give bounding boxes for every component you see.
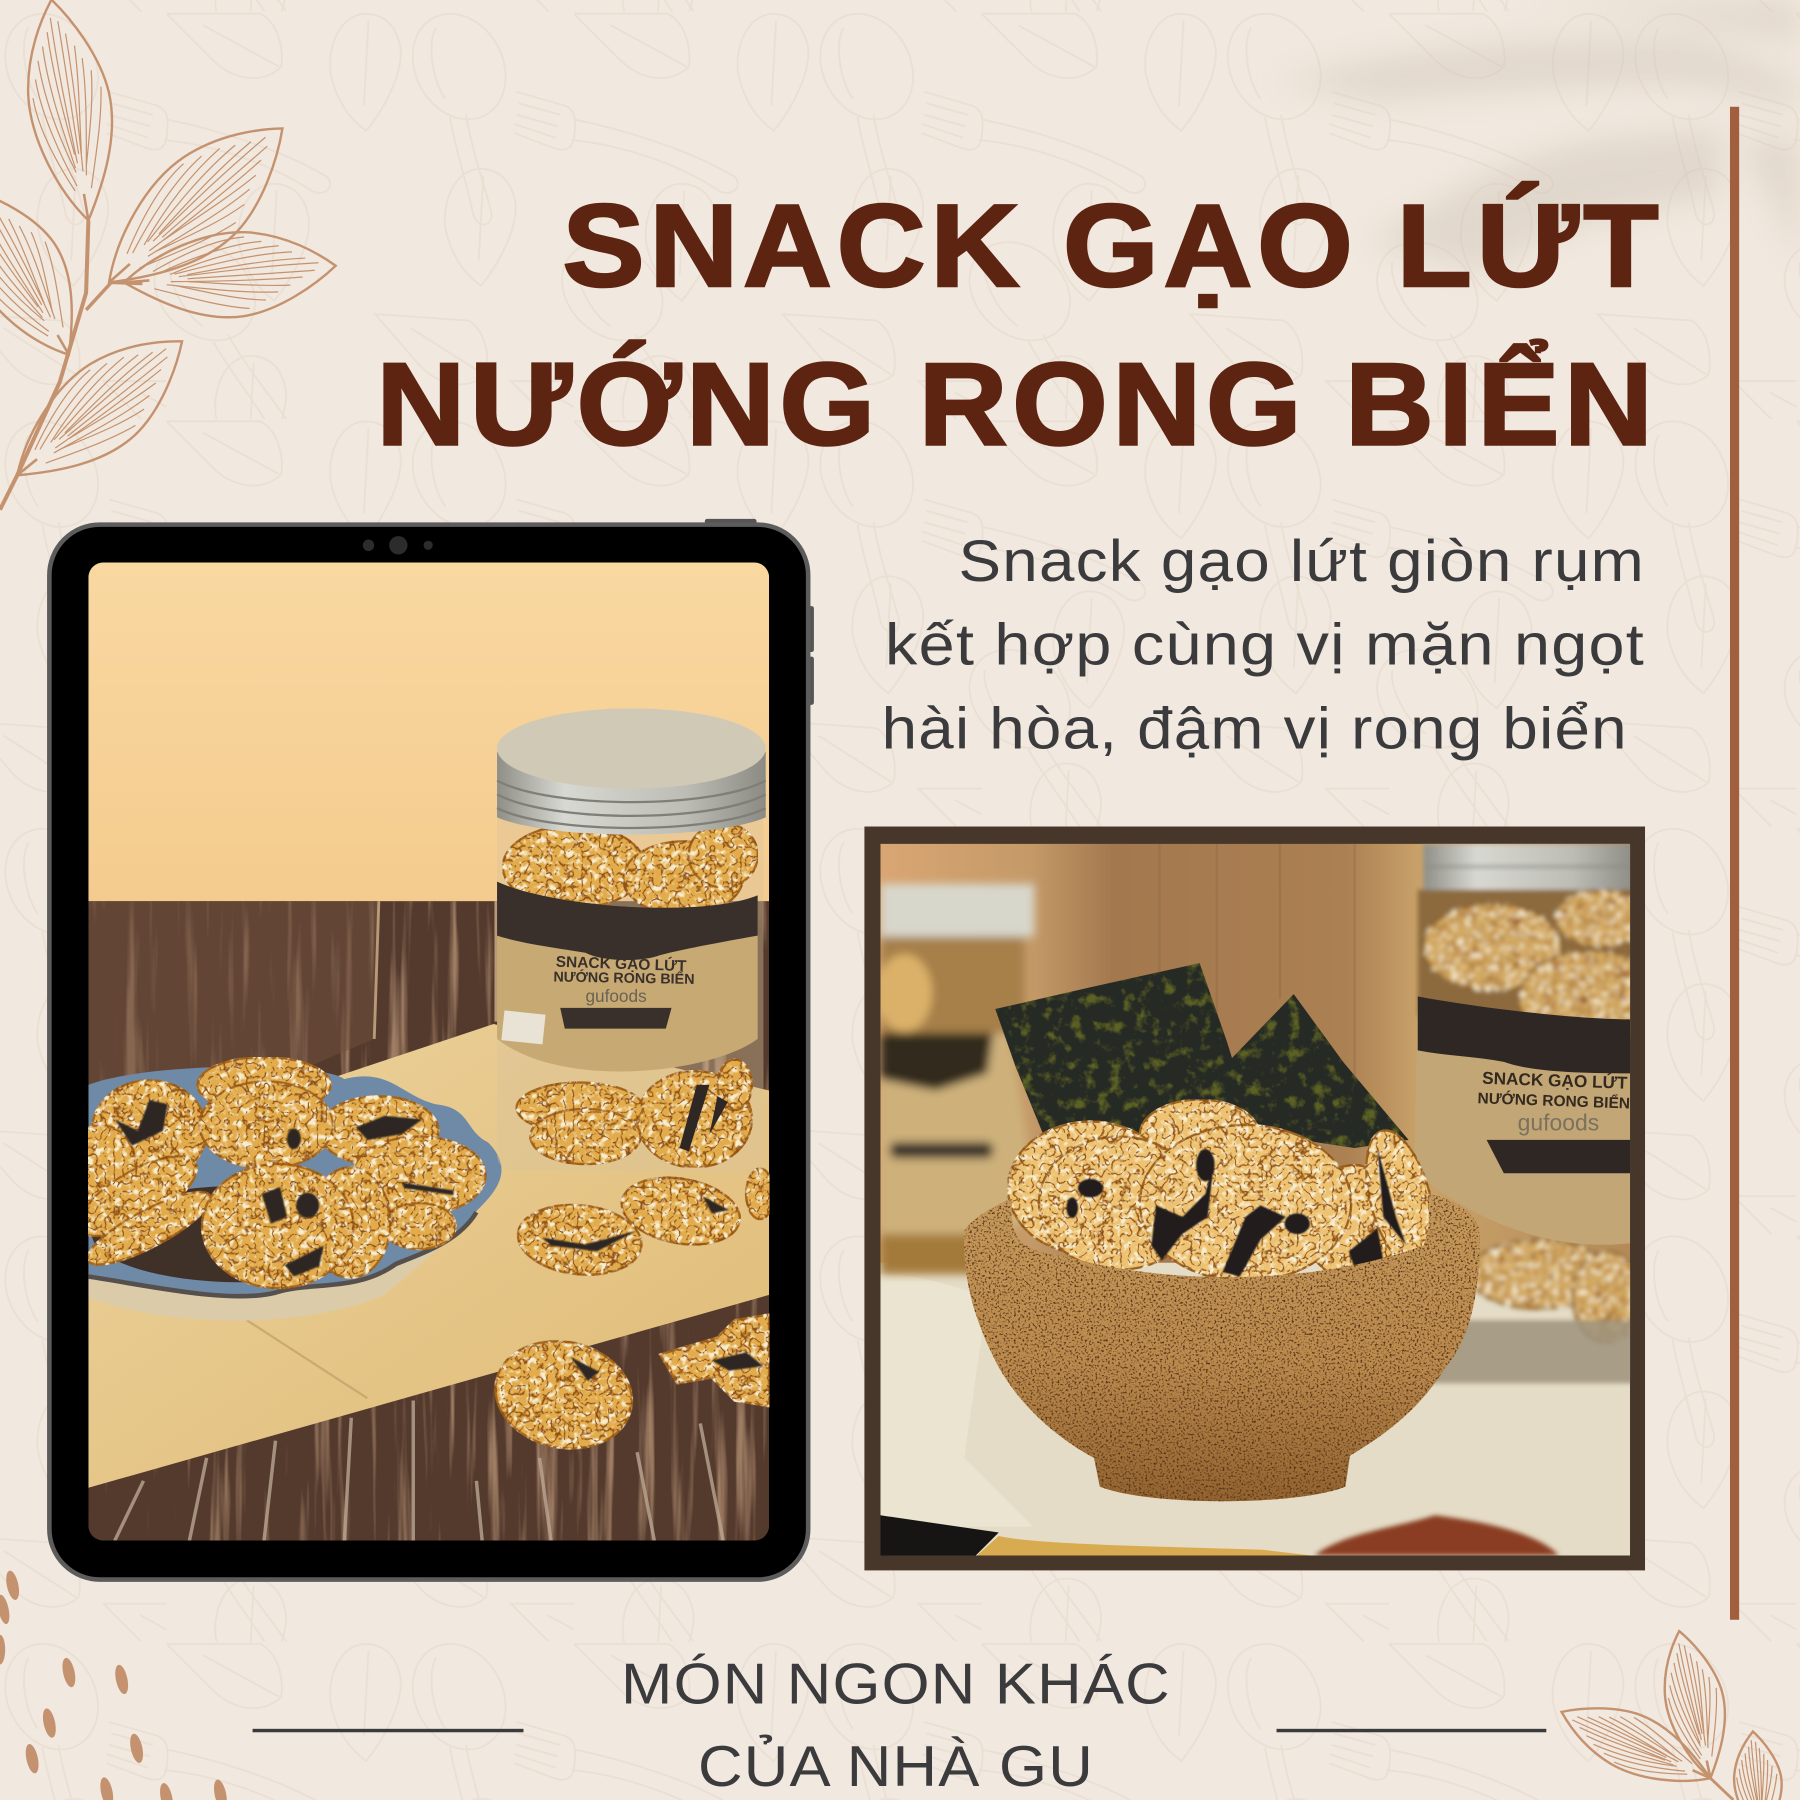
plate	[88, 1067, 501, 1321]
right jar label: SNACK GẠO LỨT	[1482, 1068, 1628, 1093]
right jar label: gufoods	[1518, 1110, 1599, 1136]
blurred right jar	[1415, 844, 1630, 1386]
jar lid	[497, 708, 766, 835]
description text	[882, 529, 1645, 761]
seaweed flakes	[115, 1100, 763, 1381]
footer heading: CỦA NHÀ GU	[698, 1734, 1094, 1799]
wooden bowl	[964, 1194, 1480, 1501]
jar label	[497, 882, 758, 1072]
vertical accent bar	[1730, 107, 1739, 1620]
branch decoration, top left	[0, 0, 339, 510]
footer heading: MÓN NGON KHÁC	[621, 1653, 1171, 1717]
blurred left jar	[877, 884, 1039, 1274]
snacks on plate	[67, 1057, 774, 1461]
title: NƯỚNG RONG BIỂN	[377, 338, 1658, 469]
tablet photo: jar and rice snacks on a board	[67, 562, 774, 1544]
jar label: SNACK GẠO LỨT	[555, 953, 687, 975]
footer rule, left	[253, 1729, 523, 1732]
soft leaf shadow, top right	[1274, 0, 1800, 273]
title	[377, 180, 1663, 469]
description text: kết hợp cùng vị mặn ngọt	[885, 613, 1645, 678]
description text: hài hòa, đậm vị rong biển	[882, 696, 1628, 761]
description text: Snack gạo lứt giòn rụm	[959, 529, 1645, 594]
bottom props	[880, 1515, 1559, 1557]
title: SNACK GẠO LỨT	[562, 180, 1663, 311]
footer rule, right	[1277, 1729, 1546, 1732]
right jar label	[1414, 996, 1630, 1245]
right jar label: NƯỚNG RONG BIỂN	[1477, 1089, 1630, 1113]
footer heading	[621, 1653, 1171, 1799]
photo frame: bowl of snacks	[864, 827, 1661, 1570]
branch decoration, bottom right	[1550, 1625, 1786, 1800]
rice grains decoration, bottom left	[0, 1570, 229, 1800]
seaweed sheets	[995, 963, 1409, 1149]
snacks in bowl	[1008, 1100, 1448, 1281]
jar label: gufoods	[585, 986, 647, 1006]
seaweed flakes in bowl	[1066, 1148, 1406, 1277]
jar label: NƯỚNG RONG BIỂN	[553, 968, 695, 988]
jar	[497, 708, 766, 1171]
tablet mockup	[49, 519, 814, 1580]
bowl photo	[877, 844, 1661, 1561]
